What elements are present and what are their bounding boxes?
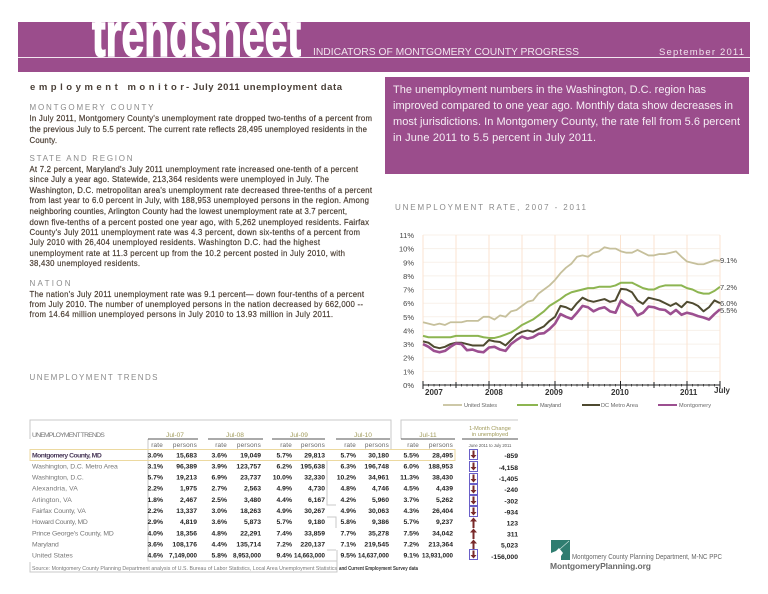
row: Howard County, MD xyxy=(32,519,518,528)
row: United States: 13,931,000 xyxy=(422,552,453,560)
y axis labels: 7% xyxy=(403,286,414,294)
row: Montgomery County: 29,813 xyxy=(304,452,325,460)
row: Maryland: 220,137 xyxy=(300,542,325,548)
row: Alexandria, VA: 4.8% xyxy=(340,486,356,492)
row: Alexandria, VA: 1,975 xyxy=(180,486,197,492)
callout: in June 2011 to 5.5 percent in July 2011. xyxy=(393,132,596,144)
row: United States xyxy=(32,552,518,561)
row: Maryland: 4.4% xyxy=(212,542,227,548)
x axis: 2008 xyxy=(485,388,503,397)
row: Maryland: 219,545 xyxy=(364,542,389,548)
row: Howard County, MD: 123 xyxy=(507,520,518,528)
table column headers: rate xyxy=(344,442,356,449)
line: DC Metro Area xyxy=(423,289,720,348)
row: Fairfax County, VA: 4.9% xyxy=(276,508,292,515)
row: United States: United States xyxy=(32,552,73,560)
chart legend: Maryland xyxy=(540,403,561,409)
row: Howard County, MD: 5.7% xyxy=(404,519,419,526)
table column headers: UNEMPLOYMENT TRENDS xyxy=(32,432,105,439)
row: Maryland: 7.1% xyxy=(340,542,356,548)
row: Montgomery County: 3.6% xyxy=(212,452,227,460)
x axis xyxy=(423,381,731,397)
table column headers: persons xyxy=(237,442,261,449)
y axis labels: 0% xyxy=(403,381,414,390)
row: Prince George's County, MD: Prince George's County, MD xyxy=(32,530,114,538)
chart legend: DC Metro Area xyxy=(601,403,639,409)
trend arrows xyxy=(470,450,478,560)
row: Washington, D.C. xyxy=(32,474,518,483)
row: Fairfax County, VA: 18,263 xyxy=(240,508,261,515)
row: Maryland: 7.2% xyxy=(404,542,419,548)
y axis labels: 10% xyxy=(399,245,414,254)
row: Washington, D.C. Metro Area: 3.9% xyxy=(212,464,227,470)
row: Montgomery County: -859 xyxy=(504,453,518,460)
row: Alexandria, VA: Alexandria, VA xyxy=(32,486,78,492)
y axis labels: 11% xyxy=(400,231,414,240)
row: Arlington, VA: 2.5% xyxy=(212,497,227,504)
row: Prince George's County, MD: 311 xyxy=(507,532,518,538)
text block: Montgomery County: County. xyxy=(30,136,57,145)
chart legend: United States xyxy=(464,403,497,409)
row: Howard County, MD: 5,873 xyxy=(244,519,261,526)
row: Montgomery County: 15,683 xyxy=(176,452,197,460)
row: Prince George's County, MD: 22,291 xyxy=(240,530,261,538)
line: Maryland xyxy=(423,283,720,338)
line: Montgomery xyxy=(423,300,720,352)
row: Montgomery County: 30,180 xyxy=(368,452,389,460)
row: Howard County, MD: 5.8% xyxy=(340,519,356,526)
source note: and Current Employment Survey data xyxy=(339,566,418,572)
row: Fairfax County, VA: 4.9% xyxy=(340,508,356,515)
table column headers: in unemployed xyxy=(472,432,508,438)
callout: most jurisdictions. In Montgomery County, the rate fell from 5.6 percent xyxy=(393,116,740,128)
text block: Montgomery County: In July 2011, Montgomery County's unemployment rate dropped two-tenths of a percent from xyxy=(30,114,372,123)
table column headers: persons xyxy=(365,442,389,449)
row: Washington, D.C. Metro Area: 6.2% xyxy=(276,464,292,470)
text block: State and Region: Washington, D.C. metropolitan area's unemployment rate decreased three-tenths of a percent xyxy=(30,186,373,195)
row: Washington, D.C. Metro Area: 188,953 xyxy=(428,464,453,470)
row: Maryland: 108,176 xyxy=(172,542,197,548)
row: Alexandria, VA: -240 xyxy=(504,487,518,494)
table column headers: rate xyxy=(151,442,163,449)
text block: Montgomery County: the previous July to 5.5 percent. The current rate reflects 28,495 unemployed residents in the xyxy=(30,125,367,134)
heading: unemployment rate chart: UNEMPLOYMENT RATE, 2007 - 2011 xyxy=(395,203,587,212)
text block: State and Region xyxy=(30,154,373,268)
row: Alexandria, VA: 4,439 xyxy=(436,486,453,492)
row: Arlington, VA: Arlington, VA xyxy=(32,497,72,504)
text block: State and Region: unemployment rate at 11.3 percent up from the 10.2 percent posted in July 2010, with xyxy=(30,249,345,258)
row: Maryland: 7.2% xyxy=(276,542,292,548)
row: Arlington, VA: 4.2% xyxy=(340,497,356,504)
row: Washington, D.C.: 6.9% xyxy=(212,474,227,482)
row: Montgomery County: 28,495 xyxy=(432,452,453,460)
row: Washington, D.C.: -1,405 xyxy=(499,476,518,483)
y axis labels: 5% xyxy=(403,313,414,322)
row: United States: 9.4% xyxy=(276,552,292,560)
row: Washington, D.C. Metro Area: 3.1% xyxy=(148,464,163,470)
row: Prince George's County, MD: 7.5% xyxy=(404,530,419,538)
row: Alexandria, VA: 2,563 xyxy=(244,486,261,492)
row: Arlington, VA: 5,262 xyxy=(436,497,453,504)
row: Fairfax County, VA xyxy=(32,508,518,516)
text block: State and Region: At 7.2 percent, Maryland's July 2011 unemployment rate increased one-tenth of a percent xyxy=(30,165,359,174)
row: Alexandria, VA: 2.2% xyxy=(148,486,163,492)
row: Washington, D.C.: 34,961 xyxy=(368,474,389,482)
chart legend: Montgomery xyxy=(679,403,711,409)
row: Washington, D.C. Metro Area: Washington, D.C. Metro Area xyxy=(32,464,118,470)
table column headers: Jul-10 xyxy=(354,432,372,439)
table column headers: Jul-11 xyxy=(419,432,437,439)
row: Maryland: Maryland xyxy=(32,542,59,548)
row: United States: 9.1% xyxy=(404,552,419,560)
icon: planning department logo xyxy=(551,540,570,560)
row: Prince George's County, MD: 18,356 xyxy=(176,530,197,538)
text block: Nation: NATION xyxy=(30,279,71,288)
x axis: 2009 xyxy=(545,388,563,397)
table column headers: rate xyxy=(407,442,419,449)
table column headers: Jul-09 xyxy=(290,432,308,439)
line end labels: 7.2% xyxy=(720,283,737,292)
row: Fairfax County, VA: 3.0% xyxy=(212,508,227,515)
row: Washington, D.C. Metro Area: 196,748 xyxy=(364,464,389,470)
row: Alexandria, VA: 4,746 xyxy=(372,486,389,492)
row: Washington, D.C. Metro Area: -4,158 xyxy=(499,465,518,472)
row: Alexandria, VA xyxy=(32,486,518,494)
y axis labels: 2% xyxy=(403,354,414,363)
row: Maryland: 3.6% xyxy=(148,542,163,548)
row: Prince George's County, MD: 7.7% xyxy=(340,530,356,538)
row: Washington, D.C.: 11.3% xyxy=(400,474,419,482)
text block: Nation: from 14.64 million unemployed persons in July 2010 to 13.93 million in July 2011. xyxy=(30,310,333,319)
row: Howard County, MD: 3.6% xyxy=(212,519,227,526)
text block: State and Region: STATE AND REGION xyxy=(30,154,133,163)
table column headers: persons xyxy=(173,442,197,449)
heading: unemployment trends: UNEMPLOYMENT TRENDS xyxy=(30,373,158,382)
y axis labels: 6% xyxy=(403,299,414,308)
row: Fairfax County, VA: 4.3% xyxy=(404,508,419,515)
row: Fairfax County, VA: 30,063 xyxy=(368,508,389,515)
table: unemployment trends xyxy=(30,420,518,572)
row: United States: 8,953,000 xyxy=(233,552,261,560)
row: Arlington, VA: 5,960 xyxy=(372,497,389,504)
text block: State and Region: County's July 2011 unemployment rate was 4.3 percent, down six-tenths of a percent from xyxy=(30,228,360,237)
text block: Nation: from July 2010. The number of unemployed persons in the nation decreased by 662,000 -- xyxy=(30,300,363,309)
section heading: employment monitor: employment monitor xyxy=(30,82,184,93)
title: trendsheet xyxy=(92,1,301,70)
line chart: unemployment rate xyxy=(399,231,737,409)
text block: State and Region: neighboring counties, Arlington County had the lowest unemployment rate at 3.7 percent, xyxy=(30,207,347,216)
table highlight: Montgomery row xyxy=(30,450,455,460)
row: Howard County, MD: 9,237 xyxy=(436,519,453,526)
department credit: Montgomery County Planning Department, M-NC PPC xyxy=(572,554,722,561)
text block: State and Region: 38,430 unemployed residents. xyxy=(30,259,140,268)
row: United States: 9.5% xyxy=(340,552,356,560)
row: Washington, D.C.: 32,330 xyxy=(304,474,325,482)
row: United States: 14,637,000 xyxy=(358,552,389,560)
section heading: employment monitor xyxy=(30,82,343,93)
x axis: 2010 xyxy=(611,388,629,397)
row: Prince George's County, MD xyxy=(32,530,518,538)
row: Arlington, VA: 6,167 xyxy=(308,497,325,504)
row: Fairfax County, VA: Fairfax County, VA xyxy=(32,508,86,515)
x axis: July xyxy=(714,386,731,395)
callout: The unemployment numbers in the Washington, D.C. region has xyxy=(393,84,706,96)
row: Alexandria, VA: 4.9% xyxy=(276,486,292,492)
row: Washington, D.C. Metro Area xyxy=(32,464,518,472)
y axis labels: 8% xyxy=(403,272,414,281)
table column headers: rate xyxy=(280,442,292,449)
row: Alexandria, VA: 4.5% xyxy=(404,486,419,492)
row: Fairfax County, VA: 2.2% xyxy=(148,508,163,515)
row: Prince George's County, MD: 33,859 xyxy=(304,530,325,538)
row: Montgomery County: 5.5% xyxy=(404,452,419,460)
line: United States xyxy=(423,247,720,325)
row: Fairfax County, VA: -934 xyxy=(504,510,518,516)
row: United States: 4.6% xyxy=(148,552,163,560)
table column headers: persons xyxy=(429,442,453,449)
table column headers: June 2011 to July 2011 xyxy=(469,443,512,448)
table column headers: 1-Month Change xyxy=(469,426,511,432)
row: Fairfax County, VA: 13,337 xyxy=(176,508,197,515)
row: Washington, D.C. Metro Area: 6.0% xyxy=(404,464,419,470)
row: Maryland: 135,714 xyxy=(236,542,261,548)
row: United States: -156,000 xyxy=(491,554,518,561)
table column headers: persons xyxy=(301,442,325,449)
source note: Source: Montgomery County Planning Department analysis of U.S. Bureau of Labor Statistics, Local Area Unemployment Statistics xyxy=(32,566,337,572)
row: United States: 7,149,000 xyxy=(169,552,197,560)
row: Washington, D.C. Metro Area: 123,757 xyxy=(236,464,261,470)
row: Washington, D.C.: Washington, D.C. xyxy=(32,474,84,482)
text block: State and Region: July 2010 with 26,404 unemployed residents. Washington D.C. had the highest xyxy=(30,238,321,247)
x axis: 2007 xyxy=(425,388,443,397)
row: United States: 5.8% xyxy=(212,552,227,560)
row: Washington, D.C.: 5.7% xyxy=(148,474,163,482)
row: Montgomery County: 19,049 xyxy=(240,452,261,460)
line end labels: 6.0% xyxy=(720,299,737,308)
y axis labels: 4% xyxy=(403,326,414,335)
y axis labels: 9% xyxy=(403,258,414,267)
table column headers: Jul-08 xyxy=(226,432,244,439)
row: Washington, D.C. Metro Area: 96,389 xyxy=(176,464,197,470)
row: Howard County, MD: 9,180 xyxy=(308,519,325,526)
line end labels xyxy=(720,256,737,315)
row: Howard County, MD: 5.7% xyxy=(276,519,292,526)
section heading: employment monitor: - July 2011 unemployment data xyxy=(186,82,343,93)
y axis labels: 3% xyxy=(403,340,414,349)
text block: State and Region: down five-tenths of a percent posted one year ago, with 5,262 unemployed residents. Fairfax xyxy=(30,218,369,227)
row: Washington, D.C.: 38,430 xyxy=(432,474,453,482)
row: Washington, D.C.: 19,213 xyxy=(176,474,197,482)
row: Prince George's County, MD: 4.8% xyxy=(212,530,227,538)
row: Arlington, VA: 3,480 xyxy=(244,497,261,504)
row: Howard County, MD: 9,386 xyxy=(372,519,389,526)
row: Howard County, MD: 2.9% xyxy=(148,519,163,526)
row: Arlington, VA xyxy=(32,497,518,506)
row: Washington, D.C. Metro Area: 195,638 xyxy=(300,464,325,470)
row: Arlington, VA: 4.4% xyxy=(276,497,292,504)
row: Montgomery County: 5.7% xyxy=(340,452,356,460)
text block: Montgomery County xyxy=(30,103,372,145)
department credit: MontgomeryPlanning.org xyxy=(550,561,651,571)
row: Arlington, VA: 2,467 xyxy=(180,497,197,504)
row: Washington, D.C.: 23,737 xyxy=(240,474,261,482)
row: Maryland: 5,023 xyxy=(501,542,518,550)
callout: improved compared to one year ago. Monthly data show decreases in xyxy=(393,100,733,112)
subtitle: INDICATORS OF MONTGOMERY COUNTY PROGRESS xyxy=(313,46,579,58)
header banner xyxy=(18,1,750,72)
text block: Montgomery County: MONTGOMERY COUNTY xyxy=(30,103,154,112)
callout xyxy=(385,77,749,174)
row: Fairfax County, VA: 30,267 xyxy=(304,508,325,515)
row: Montgomery County xyxy=(32,452,518,460)
row: Alexandria, VA: 2.7% xyxy=(212,486,227,492)
row: Maryland xyxy=(32,542,518,550)
row: Howard County, MD: Howard County, MD xyxy=(32,519,88,526)
row: Prince George's County, MD: 35,278 xyxy=(368,530,389,538)
row: Alexandria, VA: 4,730 xyxy=(308,486,325,492)
y axis labels xyxy=(399,231,414,390)
y axis labels: 1% xyxy=(403,367,414,376)
row: Washington, D.C. Metro Area: 6.3% xyxy=(340,464,356,470)
row: Howard County, MD: 4,819 xyxy=(180,519,197,526)
table column headers xyxy=(32,426,512,449)
row: Montgomery County: Montgomery County, MD xyxy=(32,452,102,460)
table column headers: Jul-07 xyxy=(166,432,184,439)
text block: Nation: The nation's July 2011 unemployment rate was 9.1 percent— down four-tenths of a percent xyxy=(30,290,365,299)
text block: State and Region: from last year to 6.0 percent in July, with 188,953 unemployed persons in the region. Among xyxy=(30,196,369,205)
row: Washington, D.C.: 10.0% xyxy=(273,474,292,482)
line end labels: 5.5% xyxy=(720,306,737,315)
row: Prince George's County, MD: 4.0% xyxy=(148,530,163,538)
department credit xyxy=(550,554,722,571)
line end labels: 9.1% xyxy=(720,256,737,265)
row: Arlington, VA: 1.8% xyxy=(148,497,163,504)
data lines xyxy=(423,247,720,352)
row: Montgomery County: 5.7% xyxy=(276,452,292,460)
chart legend xyxy=(443,403,711,409)
row: Arlington, VA: -302 xyxy=(504,498,518,506)
row: Prince George's County, MD: 34,042 xyxy=(432,530,453,538)
row: Washington, D.C.: 10.2% xyxy=(337,474,356,482)
text block: State and Region: since July a year ago. Statewide, 213,364 residents were unemployed in July. The xyxy=(30,175,329,184)
row: Maryland: 213,364 xyxy=(428,542,453,548)
date: September 2011 xyxy=(659,47,744,58)
table column headers: rate xyxy=(215,442,227,449)
row: Arlington, VA: 3.7% xyxy=(404,497,419,504)
x axis: 2011 xyxy=(680,388,698,397)
row: Montgomery County: 3.0% xyxy=(148,452,163,460)
text block: Nation xyxy=(30,279,365,319)
row: Fairfax County, VA: 26,404 xyxy=(432,508,453,515)
row: United States: 14,663,000 xyxy=(294,552,325,560)
row: Prince George's County, MD: 7.4% xyxy=(276,530,292,538)
